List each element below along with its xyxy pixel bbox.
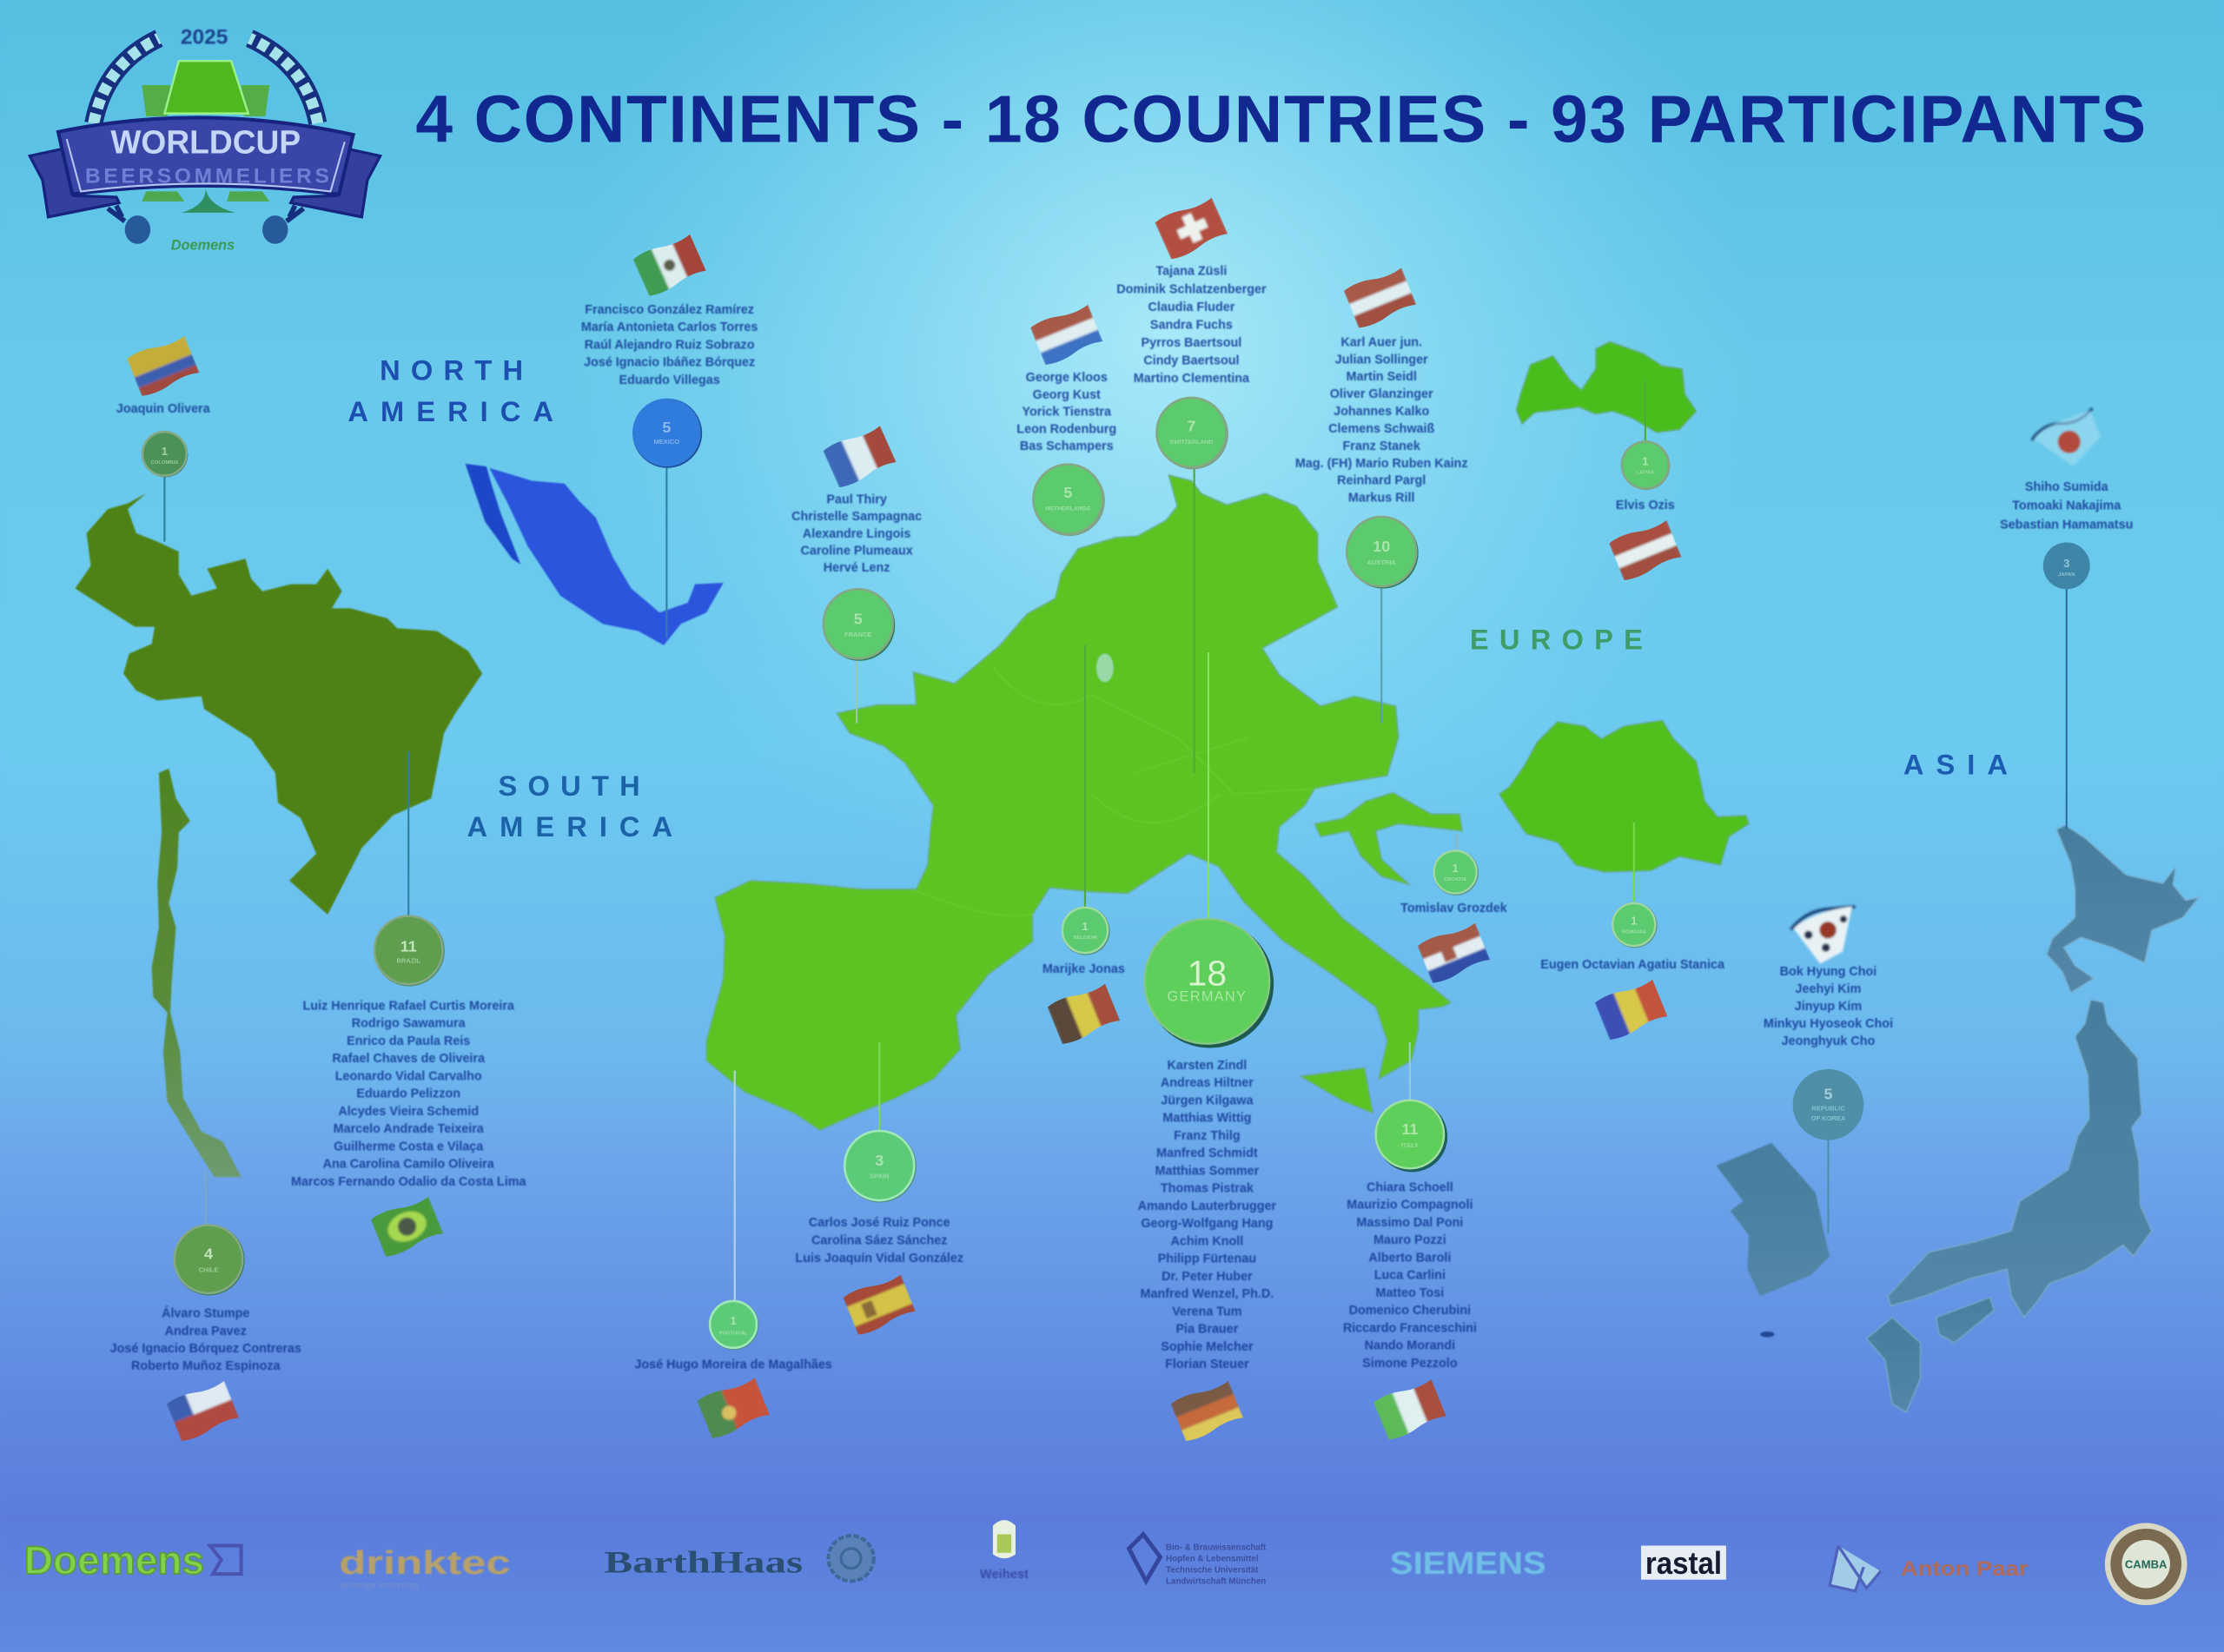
names: Germany: Karsten Zindl: [1168, 1059, 1247, 1073]
names: Germany: Manfred Wenzel, Ph.D.: [1141, 1287, 1274, 1301]
flag: Belgium: [1044, 975, 1124, 1052]
flag: Japan: [2029, 408, 2110, 477]
names: Mexico: Raúl Alejandro Ruiz Sobrazo: [585, 338, 755, 352]
names: Austria: Oliver Glanzinger: [1330, 387, 1433, 401]
badge: Japan: JAPAN: [2058, 572, 2075, 578]
names: Switzerland: Cindy Baertsoul: [1143, 354, 1239, 368]
names: Italy: Simone Pezzolo: [1362, 1357, 1458, 1371]
flag: Netherlands: [1030, 304, 1103, 365]
badge: Switzerland: 7: [1187, 417, 1195, 434]
Lake Constance: [1096, 654, 1114, 682]
maps: [76, 341, 2199, 1412]
names: Germany: Verena Tum: [1172, 1305, 1242, 1318]
badge: Croatia: [1433, 850, 1479, 895]
badge: Colombia: 1: [162, 445, 168, 458]
names: Spain: Carolina Sáez Sánchez: [811, 1234, 947, 1248]
badge: South Korea: 5: [1824, 1085, 1832, 1102]
country: Germany: [1138, 652, 1277, 1451]
badge: Spain: [844, 1130, 917, 1202]
badge: Netherlands: [1033, 465, 1105, 536]
badge: Brazil: 11: [400, 937, 417, 955]
badge: France: 5: [854, 610, 863, 627]
names: Switzerland: Tajana Züsli: [1155, 265, 1227, 279]
sponsor: CAMBA badge: CAMBA: [2125, 1558, 2168, 1571]
flag: Chile: [163, 1373, 243, 1451]
badge: Croatia: CROATIA: [1444, 877, 1467, 882]
leader line: Japan: [2066, 589, 2068, 829]
names: Germany: Andreas Hiltner: [1161, 1076, 1254, 1090]
badge: Japan: 3: [2063, 557, 2069, 570]
names: France: Christelle Sampagnac: [791, 510, 922, 524]
logo sponsor name: Doemens: [171, 237, 235, 253]
leader line: Italy: [1409, 1042, 1411, 1103]
badge: France: FRANCE: [844, 631, 871, 638]
country: Spain: [795, 1042, 963, 1343]
continent label: Europe: EUROPE: [1470, 624, 1653, 656]
names: Japan: Shiho Sumida: [2025, 480, 2109, 494]
leader line: Mexico: [665, 466, 667, 638]
badge: Netherlands: 5: [1063, 484, 1072, 501]
badge: Italy: 11: [1401, 1120, 1418, 1138]
names: Austria: Julian Sollinger: [1335, 353, 1428, 367]
names: Belgium: Marijke Jonas: [1042, 962, 1125, 976]
badge: Latvia: LATVIA: [1636, 470, 1655, 475]
country: Colombia: [116, 327, 211, 542]
leader line: Belgium: [1084, 645, 1086, 908]
sponsor: drinktec: drinktec: [339, 1544, 511, 1581]
names: Austria: Martin Seidl: [1347, 370, 1417, 384]
country: Portugal: [634, 1071, 832, 1446]
badge: Mexico: [632, 399, 702, 468]
names: Brazil: Alcydes Vieira Schemid: [338, 1105, 479, 1119]
names: Germany: Dr. Peter Huber: [1162, 1270, 1253, 1284]
names: Brazil: Rafael Chaves de Oliveira: [332, 1052, 486, 1066]
names: Italy: Matteo Tosi: [1375, 1286, 1444, 1300]
badge: South Korea: REPUBLIC: [1811, 1104, 1845, 1112]
logo wreath: [94, 38, 318, 123]
names: Chile: Andrea Pavez: [165, 1325, 247, 1338]
country: Mexico: [581, 226, 758, 638]
names: Germany: Jürgen Kilgawa: [1161, 1094, 1254, 1107]
map: Mexico: [466, 464, 724, 645]
badge: Chile: CHILE: [199, 1265, 218, 1273]
names: Brazil: Guilherme Costa e Vilaça: [334, 1140, 484, 1153]
names: South Korea: Jinyup Kim: [1795, 1000, 1862, 1014]
badge: Netherlands: NETHERLANDS: [1046, 506, 1091, 512]
country: France: [791, 418, 922, 724]
names: Chile: Álvaro Stumpe: [162, 1306, 249, 1321]
names: Austria: Karl Auer jun.: [1340, 335, 1422, 349]
names: Netherlands: Bas Schampers: [1020, 439, 1114, 453]
leader line: Switzerland: [1194, 468, 1195, 773]
names: Chile: Roberto Muñoz Espinoza: [131, 1359, 281, 1373]
names: Italy: Alberto Baroli: [1368, 1251, 1451, 1265]
names: Brazil: Leonardo Vidal Carvalho: [335, 1069, 482, 1083]
badge: Chile: 4: [204, 1246, 213, 1263]
badge: Germany: GERMANY: [1168, 989, 1247, 1005]
sponsor: drinktec: [339, 1544, 511, 1591]
names: France: Caroline Plumeaux: [800, 544, 913, 558]
names: Mexico: José Ignacio Ibáñez Bórquez: [584, 356, 755, 370]
names: Austria: Clemens Schwaiß: [1328, 422, 1434, 436]
country: Brazil: [291, 751, 526, 1265]
sponsor: Siemens: SIEMENS: [1390, 1545, 1546, 1581]
names: Germany: Amando Lauterbrugger: [1138, 1199, 1277, 1213]
badge: Chile: [174, 1225, 245, 1295]
badge: Portugal: 1: [730, 1314, 737, 1327]
badge: Germany: [1145, 919, 1274, 1048]
names: Switzerland: Dominik Schlatzenberger: [1116, 282, 1267, 296]
badge: Spain: 3: [875, 1152, 884, 1169]
sponsor: academic logo: Hopfen & Lebensmittel: [1166, 1555, 1259, 1564]
flag: Germany: [1168, 1373, 1248, 1451]
sponsor: Anton Paar: Anton Paar: [1901, 1557, 2029, 1581]
names: Romania: Eugen Octavian Agatiu Stanica: [1540, 958, 1725, 972]
flag: South Korea: [1788, 897, 1870, 969]
names: Brazil: Enrico da Paula Reis: [347, 1034, 470, 1048]
continent label: North America: NORTH: [380, 354, 533, 387]
continent label: South America: [467, 770, 685, 843]
logo glass base and hops: [108, 188, 303, 244]
names: Switzerland: Claudia Fluder: [1148, 301, 1235, 314]
names: Germany: Sophie Melcher: [1161, 1340, 1254, 1354]
leader line: Romania: [1633, 823, 1635, 902]
names: Italy: Massimo Dal Poni: [1356, 1216, 1463, 1230]
country: Croatia: [1400, 834, 1507, 992]
country: Belgium: [1042, 645, 1125, 1052]
names: Colombia: Joaquin Olivera: [116, 402, 211, 416]
badge: Colombia: [142, 432, 188, 477]
map: Latvia: [1516, 341, 1697, 433]
names: Italy: Riccardo Franceschini: [1343, 1321, 1477, 1335]
names: Germany: Pia Brauer: [1175, 1323, 1239, 1337]
names: Italy: Luca Carlini: [1374, 1269, 1446, 1283]
names: France: Alexandre Lingois: [803, 527, 910, 541]
names: Germany: Manfred Schmidt: [1156, 1146, 1258, 1160]
badge: Switzerland: SWITZERLAND: [1170, 439, 1213, 446]
badge: Austria: 10: [1373, 538, 1390, 555]
leader line: Spain: [878, 1042, 880, 1134]
flag: Croatia: [1414, 915, 1494, 992]
names: Brazil: Ana Carolina Camilo Oliveira: [323, 1158, 495, 1172]
sponsor: drinktec: beverage technology: [341, 1582, 420, 1591]
names: Brazil: Luiz Henrique Rafael Curtis Moreira: [303, 999, 515, 1013]
names: South Korea: Bok Hyung Choi: [1780, 965, 1876, 979]
flag: Romania: [1592, 971, 1672, 1047]
map: Jeju: [1760, 1332, 1774, 1338]
names: Germany: Florian Steuer: [1165, 1358, 1249, 1371]
names: Germany: Thomas Pistrak: [1161, 1182, 1254, 1196]
names: Germany: Matthias Wittig: [1162, 1112, 1251, 1126]
leader line: Austria: [1380, 585, 1382, 724]
names: Brazil: Eduardo Pelizzon: [356, 1087, 460, 1101]
names: Switzerland: Pyrros Baertsoul: [1142, 336, 1241, 350]
badge: Switzerland: [1156, 398, 1228, 469]
flag: Austria: [1343, 268, 1416, 328]
logo year: 2025: [181, 26, 228, 50]
badge: Romania: [1612, 902, 1658, 948]
map: Japan: [1867, 825, 2199, 1412]
badge: South Korea: [1793, 1069, 1863, 1140]
continent label: North America: [348, 354, 566, 427]
flag: France: [824, 426, 897, 488]
logo beer glasses: [142, 61, 269, 116]
names: Austria: Franz Stanek: [1343, 439, 1420, 453]
sponsor: Rastal: rastal: [1645, 1545, 1722, 1581]
leader line: Portugal: [734, 1071, 736, 1302]
continent label: North America: AMERICA: [348, 395, 566, 427]
country: Japan: [2000, 408, 2133, 829]
badge: Belgium: [1062, 907, 1110, 955]
badge: Germany: 18: [1188, 954, 1227, 994]
country: Switzerland: [1116, 189, 1267, 773]
country: South Korea: [1764, 897, 1893, 1233]
names: Brazil: Marcelo Andrade Teixeira: [334, 1122, 485, 1136]
badge: Mexico: 5: [662, 419, 671, 436]
names: South Korea: Jeonghyuk Cho: [1782, 1034, 1876, 1048]
badge: Mexico: MEXICO: [654, 438, 679, 446]
badge: Croatia: 1: [1452, 862, 1459, 875]
sponsors row: [24, 1520, 2188, 1605]
badge: Brazil: BRAZIL: [396, 957, 420, 965]
leader line: Chile: [205, 1170, 207, 1228]
names: Latvia: Elvis Ozis: [1616, 499, 1675, 512]
names: Brazil: Rodrigo Sawamura: [352, 1017, 467, 1031]
names: Croatia: Tomislav Grozdek: [1400, 902, 1507, 915]
names: Austria: Reinhard Pargl: [1337, 474, 1426, 488]
title: 4 CONTINENTS - 18 COUNTRIES - 93 PARTICIPANTS: [415, 83, 2146, 156]
continent label: Asia: ASIA: [1903, 748, 2020, 780]
flag: Mexico: [632, 235, 706, 296]
leader line: France: [856, 659, 857, 724]
names: Italy: Nando Morandi: [1365, 1339, 1455, 1353]
logo wordmark: WORLDCUP: [110, 123, 301, 160]
flag: Latvia: [1605, 512, 1685, 590]
names: Japan: Tomoaki Nakajima: [2012, 499, 2121, 513]
leader line: Brazil: [407, 751, 409, 922]
map: Colombia and Brazil: [76, 493, 482, 915]
sponsor: cup logo: Weihest: [980, 1568, 1029, 1582]
names: Italy: Maurizio Compagnoli: [1347, 1199, 1473, 1213]
names: Austria: Mag. (FH) Mario Ruben Kainz: [1295, 457, 1468, 471]
map: Croatia: [1314, 793, 1462, 885]
names: Netherlands: George Kloos: [1026, 371, 1108, 385]
country: Romania: [1540, 823, 1725, 1047]
names: South Korea: Jeehyi Kim: [1796, 982, 1861, 996]
badge: Romania: ROMANIA: [1622, 929, 1647, 935]
names: South Korea: Minkyu Hyoseok Choi: [1764, 1017, 1893, 1031]
country: Austria: [1295, 260, 1468, 724]
leader line: Croatia: [1456, 834, 1458, 851]
names: Italy: Mauro Pozzi: [1373, 1233, 1446, 1247]
names: Austria: Markus Rill: [1348, 492, 1415, 506]
badge: Portugal: PORTUGAL: [719, 1331, 748, 1336]
names: Austria: Johannes Kalko: [1334, 405, 1429, 419]
map: South Korea: [1716, 1143, 1830, 1296]
map: central Europe: [706, 475, 1451, 1130]
names: Germany: Achim Knoll: [1171, 1234, 1243, 1248]
sponsor: academic logo: [1129, 1534, 1267, 1587]
map: Sicily: [1301, 1067, 1373, 1113]
sponsor: BarthHaas: [605, 1536, 874, 1581]
names: Netherlands: Georg Kust: [1033, 388, 1101, 402]
names: France: Paul Thiry: [826, 493, 887, 507]
leader line: Latvia: [1645, 380, 1646, 442]
names: Spain: Carlos José Ruiz Ponce: [809, 1216, 950, 1230]
country: Italy: [1343, 1042, 1477, 1448]
map: Chile: [152, 769, 242, 1177]
badge: Belgium: 1: [1082, 920, 1089, 933]
names: Switzerland: Sandra Fuchs: [1150, 318, 1233, 332]
badge: Japan: [2043, 542, 2090, 589]
country: Netherlands: [1016, 297, 1116, 536]
badge: Latvia: [1622, 442, 1670, 490]
logo ribbon: [30, 117, 381, 217]
flag: Switzerland: [1155, 198, 1228, 259]
names: Italy: Domenico Cherubini: [1349, 1304, 1471, 1318]
names: Mexico: Eduardo Villegas: [619, 373, 720, 387]
leader line: Germany: [1208, 652, 1209, 922]
sponsor: academic logo: Bio- & Brauwissenschaft: [1166, 1543, 1267, 1552]
sponsor: BarthHaas: BarthHaas: [605, 1545, 803, 1580]
names: Mexico: María Antonieta Carlos Torres: [581, 320, 758, 334]
names: Mexico: Francisco González Ramírez: [585, 303, 754, 317]
sponsor: cup logo: [980, 1520, 1029, 1582]
flag: Portugal: [694, 1370, 774, 1446]
names: Japan: Sebastian Hamamatsu: [2000, 518, 2133, 532]
badge: Brazil: [374, 915, 445, 986]
names: Brazil: Marcos Fernando Odalio da Costa Lima: [291, 1175, 526, 1189]
names: Netherlands: Yorick Tienstra: [1023, 406, 1112, 420]
badge: Latvia: 1: [1642, 454, 1648, 467]
country: Latvia: [1609, 380, 1682, 580]
leader line: South Korea: [1827, 1139, 1829, 1233]
badge: Romania: 1: [1631, 914, 1637, 927]
flag: Italy: [1370, 1371, 1451, 1448]
leader line: Colombia: [163, 477, 165, 542]
badge: Portugal: [709, 1300, 758, 1350]
badge: Spain: SPAIN: [870, 1173, 889, 1180]
badge: Austria: [1347, 517, 1419, 589]
sponsor: academic logo: Technische Universität: [1166, 1566, 1259, 1576]
badge: Colombia: COLOMBIA: [150, 460, 179, 466]
badge: Belgium: BELGIUM: [1073, 935, 1097, 941]
logo: World Cup Beersommeliers 2025: [30, 26, 381, 253]
names: Germany: Matthias Sommer: [1155, 1164, 1260, 1178]
names: Portugal: José Hugo Moreira de Magalhães: [634, 1358, 832, 1371]
sponsor: CAMBA badge: [2105, 1523, 2188, 1605]
badge: South Korea: OF KOREA: [1811, 1114, 1846, 1122]
continent label: South America: AMERICA: [467, 810, 685, 843]
names: Germany: Franz Thilg: [1174, 1129, 1241, 1143]
names: Germany: Georg-Wolfgang Hang: [1141, 1217, 1273, 1231]
sponsor: academic logo: Landwirtschaft München: [1166, 1577, 1266, 1587]
names: Spain: Luis Joaquín Vidal González: [795, 1252, 963, 1265]
sponsor: Anton Paar: [1830, 1546, 2029, 1591]
names: France: Hervé Lenz: [824, 561, 890, 575]
badge: France: [824, 589, 895, 661]
badge: Italy: ITALY: [1401, 1141, 1419, 1149]
names: Netherlands: Leon Rodenburg: [1016, 422, 1116, 436]
sponsor: Doemens: Doemens: [24, 1538, 204, 1583]
flag: Spain: [840, 1266, 919, 1343]
badge: Italy: [1376, 1100, 1447, 1172]
flag: Colombia: [127, 335, 200, 396]
flag: Brazil: [367, 1188, 447, 1265]
continent label: South America: SOUTH: [499, 770, 651, 802]
names: Germany: Philipp Fürtenau: [1158, 1252, 1256, 1266]
names: Chile: José Ignacio Bórquez Contreras: [110, 1342, 301, 1356]
country: Chile: [110, 1170, 301, 1451]
names: Italy: Chiara Schoell: [1367, 1180, 1453, 1194]
badge: Austria: AUSTRIA: [1367, 558, 1396, 566]
names: Switzerland: Martino Clementina: [1134, 372, 1250, 386]
map: Romania: [1499, 720, 1749, 872]
logo subtitle: BEERSOMMELIERS: [85, 165, 329, 188]
